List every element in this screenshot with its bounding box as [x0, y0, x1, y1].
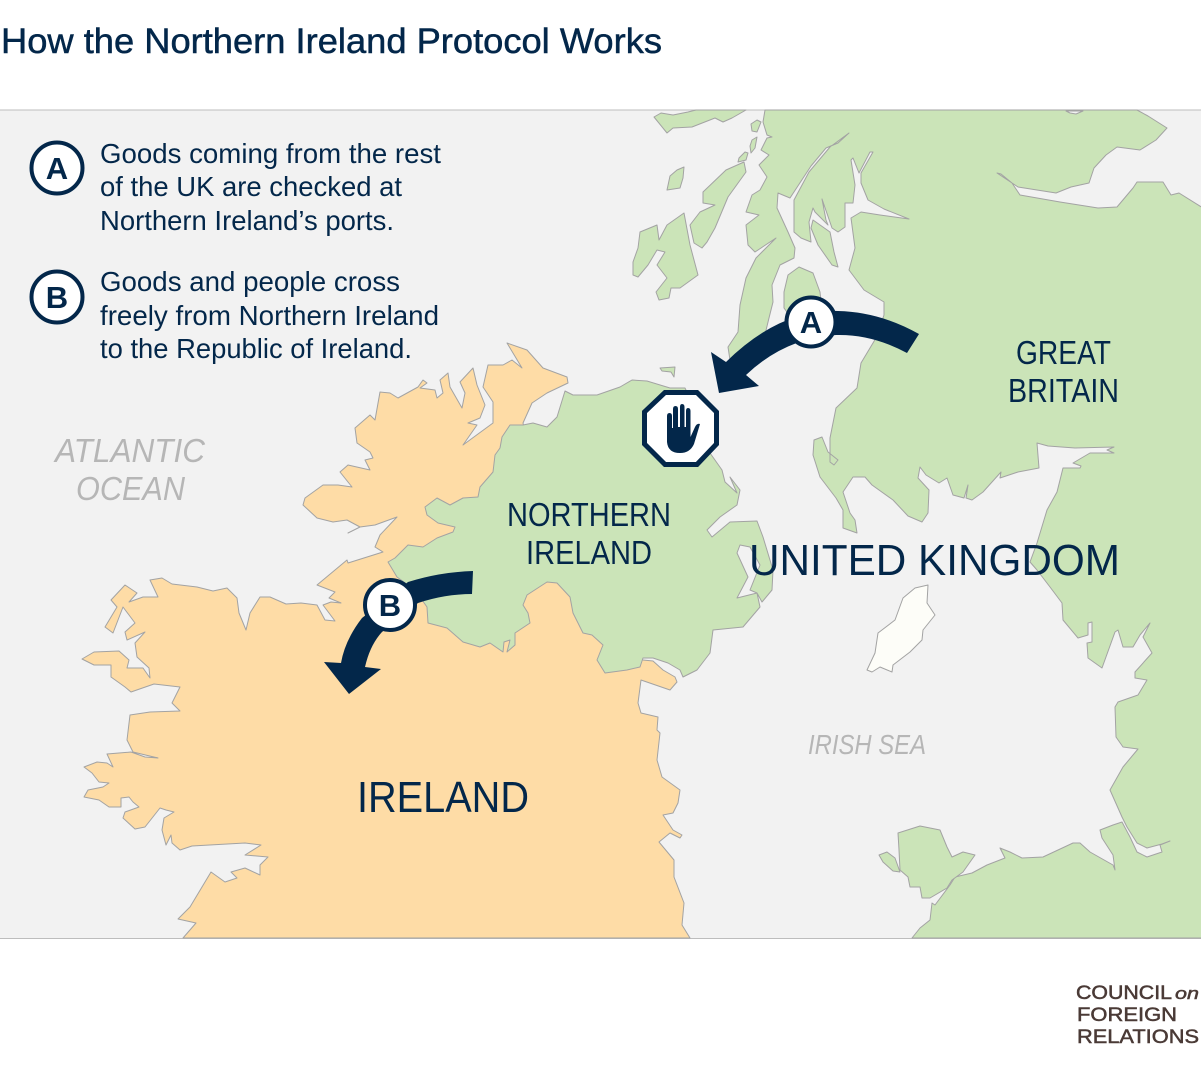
land: Isle of Man	[867, 585, 935, 672]
label: Great Britain: GREAT	[1016, 334, 1111, 371]
label: Northern Ireland	[507, 496, 671, 571]
legend item B: Goods and people cross	[100, 266, 400, 297]
land: Bute	[811, 220, 838, 267]
land: Jura	[690, 162, 746, 248]
label: Northern Ireland: NORTHERN	[507, 496, 671, 533]
label: Atlantic Ocean: OCEAN	[76, 470, 185, 507]
legend item B: to the Republic of Ireland.	[100, 333, 412, 364]
map panel background	[0, 110, 1201, 938]
label: Irish Sea: IRISH SEA	[808, 729, 926, 760]
land: Great Britain mainland	[728, 110, 1201, 938]
logo: Council on Foreign Relations: COUNCIL	[1076, 983, 1172, 1004]
land: Ireland	[82, 343, 690, 938]
logo: Council on Foreign Relations: RELATIONS	[1077, 1027, 1199, 1048]
title: How the Northern Ireland Protocol Works	[1, 22, 662, 61]
land: Holy Island	[879, 852, 900, 872]
land: Islay	[633, 213, 698, 300]
land: Colonsay	[667, 167, 684, 190]
legend item B	[32, 266, 439, 364]
land: Northern Ireland	[388, 380, 773, 677]
label: Great Britain	[1008, 334, 1119, 409]
legend item A	[32, 138, 441, 236]
icon: stop sign with hand	[644, 392, 716, 464]
legend item A: Northern Ireland’s ports.	[100, 205, 394, 236]
logo: Council on Foreign Relations: on	[1175, 984, 1199, 1003]
label: Ireland: IRELAND	[357, 773, 529, 822]
legend item B: B	[46, 280, 68, 315]
badge B on map	[365, 580, 415, 630]
map land	[82, 110, 1201, 938]
land: Rathlin Island	[660, 367, 675, 377]
badge B on map: B	[379, 588, 401, 623]
logo: Council on Foreign Relations: FOREIGN	[1077, 1005, 1177, 1026]
logo: Council on Foreign Relations	[1076, 983, 1199, 1048]
badge A on map	[786, 298, 836, 346]
arrow B: Northern Ireland to Republic of Ireland	[324, 571, 473, 694]
label: Great Britain: BRITAIN	[1008, 372, 1119, 409]
label: Atlantic Ocean: ATLANTIC	[53, 432, 206, 469]
land: Mull	[654, 110, 746, 133]
legend item A: A	[46, 151, 68, 186]
land: Arran	[784, 267, 822, 330]
land: small Hebridean islands	[738, 120, 761, 162]
label: United Kingdom: UNITED KINGDOM	[749, 536, 1120, 585]
label: Atlantic Ocean	[53, 432, 206, 507]
arrow A: Great Britain to Northern Ireland ports	[711, 311, 919, 393]
water: Firth inlet at top edge	[1066, 111, 1083, 114]
legend item A: Goods coming from the rest	[100, 138, 441, 169]
land: Anglesey	[898, 826, 975, 898]
legend item A: of the UK are checked at	[100, 171, 402, 202]
legend item B: freely from Northern Ireland	[100, 300, 439, 331]
label: Northern Ireland: IRELAND	[526, 534, 652, 571]
badge A on map: A	[800, 305, 822, 340]
